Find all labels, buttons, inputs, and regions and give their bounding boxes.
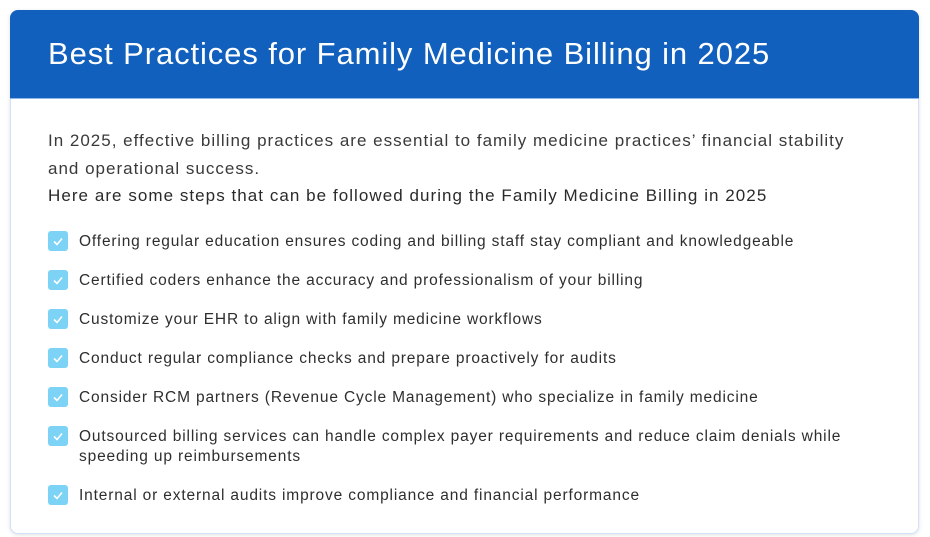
subheading: Here are some steps that can be followed during the Family Medicine Billing in 2025 <box>48 186 767 205</box>
item 2 <box>48 270 643 290</box>
item 6 <box>48 426 841 465</box>
text: Internal or external audits improve compliance and financial performance <box>79 487 640 504</box>
intro text: In 2025, effective billing practices are essential to family medicine practices’ financial stability <box>48 131 844 150</box>
text: Customize your EHR to align with family medicine workflows <box>79 311 543 328</box>
text: Conduct regular compliance checks and prepare proactively for audits <box>79 350 617 367</box>
text: Offering regular education ensures coding and billing staff stay compliant and knowledgeable <box>79 233 794 250</box>
item 5 <box>48 387 759 407</box>
text: Certified coders enhance the accuracy and professionalism of your billing <box>79 272 643 289</box>
text: Outsourced billing services can handle complex payer requirements and reduce claim denials while <box>79 428 841 445</box>
item 1 <box>48 231 794 251</box>
intro text line 2: and operational success. <box>48 159 260 178</box>
item 7 <box>48 485 640 505</box>
text: Consider RCM partners (Revenue Cycle Management) who specialize in family medicine <box>79 389 759 406</box>
text: speeding up reimbursements <box>79 448 301 465</box>
item 4 <box>48 348 617 368</box>
header banner <box>10 10 919 99</box>
title: Best Practices for Family Medicine Billing in 2025 <box>48 36 770 71</box>
item 3 <box>48 309 543 329</box>
